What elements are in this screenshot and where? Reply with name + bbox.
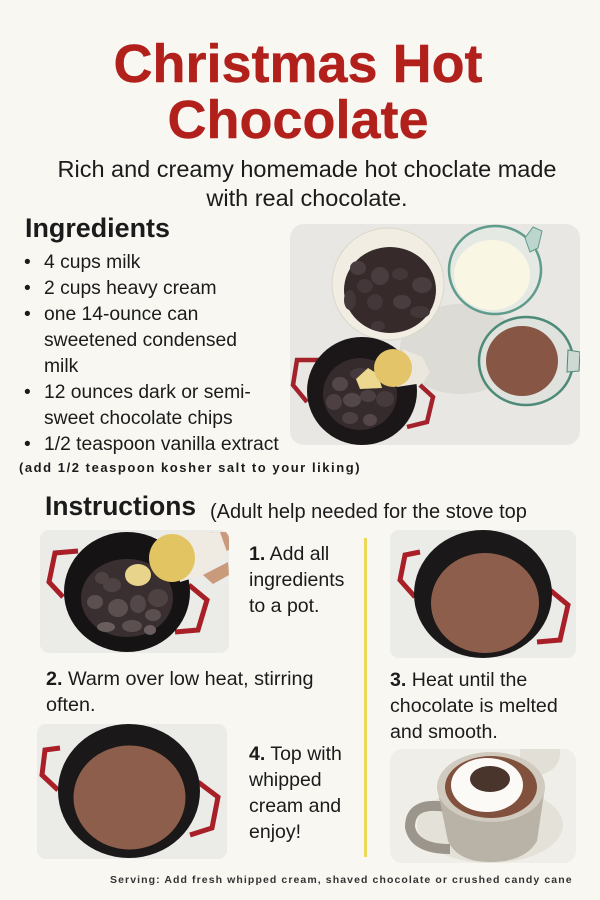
ingredients list: 4 cups milk xyxy=(44,252,140,273)
step 3 text: and smooth. xyxy=(390,721,498,743)
adult help note: (Adult help needed for the stove top xyxy=(210,501,527,523)
step 1 text: to a pot. xyxy=(249,595,319,617)
step 2 text: often. xyxy=(46,694,96,716)
title: Chocolate xyxy=(167,90,429,150)
photo: hot chocolate mug xyxy=(390,749,576,863)
photo: step 4 pot xyxy=(37,724,227,859)
photo: step 3 pot xyxy=(390,530,576,658)
red pot with cream xyxy=(293,337,433,445)
milk jug xyxy=(449,226,542,314)
divider xyxy=(364,538,366,857)
ingredients list: • xyxy=(24,382,31,403)
step 3 text: chocolate is melted xyxy=(390,695,558,717)
step 4 text xyxy=(249,743,342,843)
subtitle xyxy=(58,156,556,211)
step 4 text: enjoy! xyxy=(249,821,301,843)
step 3 text xyxy=(390,669,558,743)
chocolate jug xyxy=(479,317,580,405)
photo: step 1 pot xyxy=(40,530,229,653)
ingredients list: 1/2 teaspoon vanilla extract xyxy=(44,434,279,455)
step 1 text: 1. Add all xyxy=(249,543,329,565)
ingredients list: 2 cups heavy cream xyxy=(44,278,217,299)
ingredients list: 12 ounces dark or semi- xyxy=(44,382,251,403)
bowl of chocolate xyxy=(332,228,444,340)
photo: ingredients overhead xyxy=(290,224,580,445)
title: Christmas Hot xyxy=(113,34,483,94)
step 3 text: 3. Heat until the xyxy=(390,669,527,691)
ingredients list: • xyxy=(24,434,31,455)
ingredients list: • xyxy=(24,278,31,299)
step 4 text: whipped xyxy=(249,769,322,791)
serving note: Serving: Add fresh whipped cream, shaved chocolate or crushed candy cane xyxy=(110,874,573,886)
ingredients list: • xyxy=(24,252,31,273)
step 4 text: 4. Top with xyxy=(249,743,342,765)
ingredients list: one 14-ounce can xyxy=(44,304,198,325)
salt note: (add 1/2 teaspoon kosher salt to your liking) xyxy=(19,460,361,475)
step 1 text xyxy=(249,543,344,617)
ingredients list: sweet chocolate chips xyxy=(44,408,233,429)
ingredients list: milk xyxy=(44,356,78,377)
subtitle: Rich and creamy homemade hot choclate made xyxy=(58,156,556,182)
step 1 text: ingredients xyxy=(249,569,344,591)
ingredients heading: Ingredients xyxy=(25,213,170,243)
title xyxy=(113,34,483,150)
instructions heading: Instructions xyxy=(45,491,196,521)
ingredients list: sweetened condensed xyxy=(44,330,237,351)
ingredients list xyxy=(24,252,279,455)
ingredients list: • xyxy=(24,304,31,325)
subtitle: with real chocolate. xyxy=(206,185,408,211)
step 2 text: 2. Warm over low heat, stirring xyxy=(46,668,314,690)
step 4 text: cream and xyxy=(249,795,341,817)
step 2 text xyxy=(46,668,314,716)
